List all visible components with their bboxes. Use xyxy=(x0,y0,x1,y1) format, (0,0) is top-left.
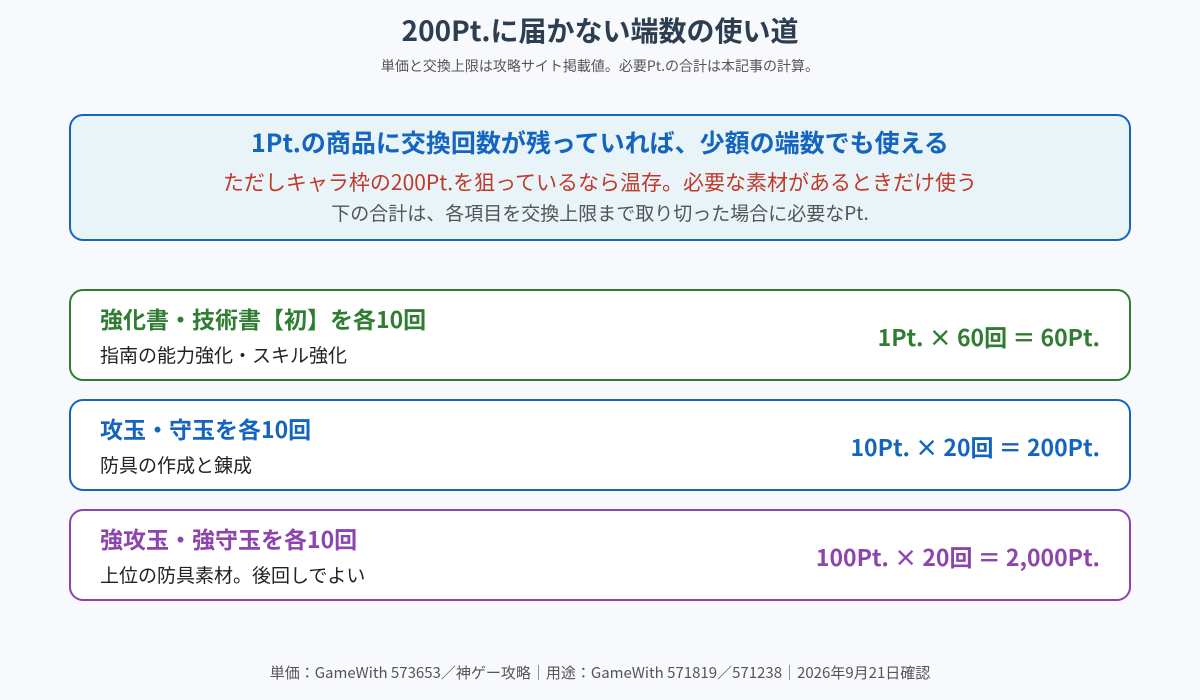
footer source: 単価：GameWith 573653／神ゲー攻略｜用途：GameWith 571819／571238｜2026年9月21日確認 xyxy=(270,662,930,683)
callout heading: 1Pt.の商品に交換回数が残っていれば、少額の端数でも使える xyxy=(251,124,949,160)
row 3 formula: 100Pt. × 20回 ＝ 2,000Pt. xyxy=(816,539,1100,573)
row 2 heading: 攻玉・守玉を各10回 xyxy=(100,411,311,445)
callout note: 下の合計は、各項目を交換上限まで取り切った場合に必要なPt. xyxy=(331,199,869,226)
row 3 heading: 強攻玉・強守玉を各10回 xyxy=(100,521,357,555)
title: 200Pt.に届かない端数の使い道 xyxy=(402,10,798,50)
row 2 formula: 10Pt. × 20回 ＝ 200Pt. xyxy=(850,429,1100,463)
row 1 heading: 強化書・技術書【初】を各10回 xyxy=(100,301,426,335)
panel: row 1 xyxy=(69,289,1131,381)
subtitle: 単価と交換上限は攻略サイト掲載値。必要Pt.の合計は本記事の計算。 xyxy=(381,56,819,76)
row 1 formula: 1Pt. × 60回 ＝ 60Pt. xyxy=(878,319,1100,353)
panel: row 2 xyxy=(69,399,1131,491)
panel: summary callout xyxy=(69,114,1131,241)
row 2 description: 防具の作成と錬成 xyxy=(100,451,252,478)
panel: row 3 xyxy=(69,509,1131,601)
row 3 description: 上位の防具素材。後回しでよい xyxy=(100,561,365,588)
row 1 description: 指南の能力強化・スキル強化 xyxy=(100,341,347,368)
callout warning: ただしキャラ枠の200Pt.を狙っているなら温存。必要な素材があるときだけ使う xyxy=(223,167,977,197)
